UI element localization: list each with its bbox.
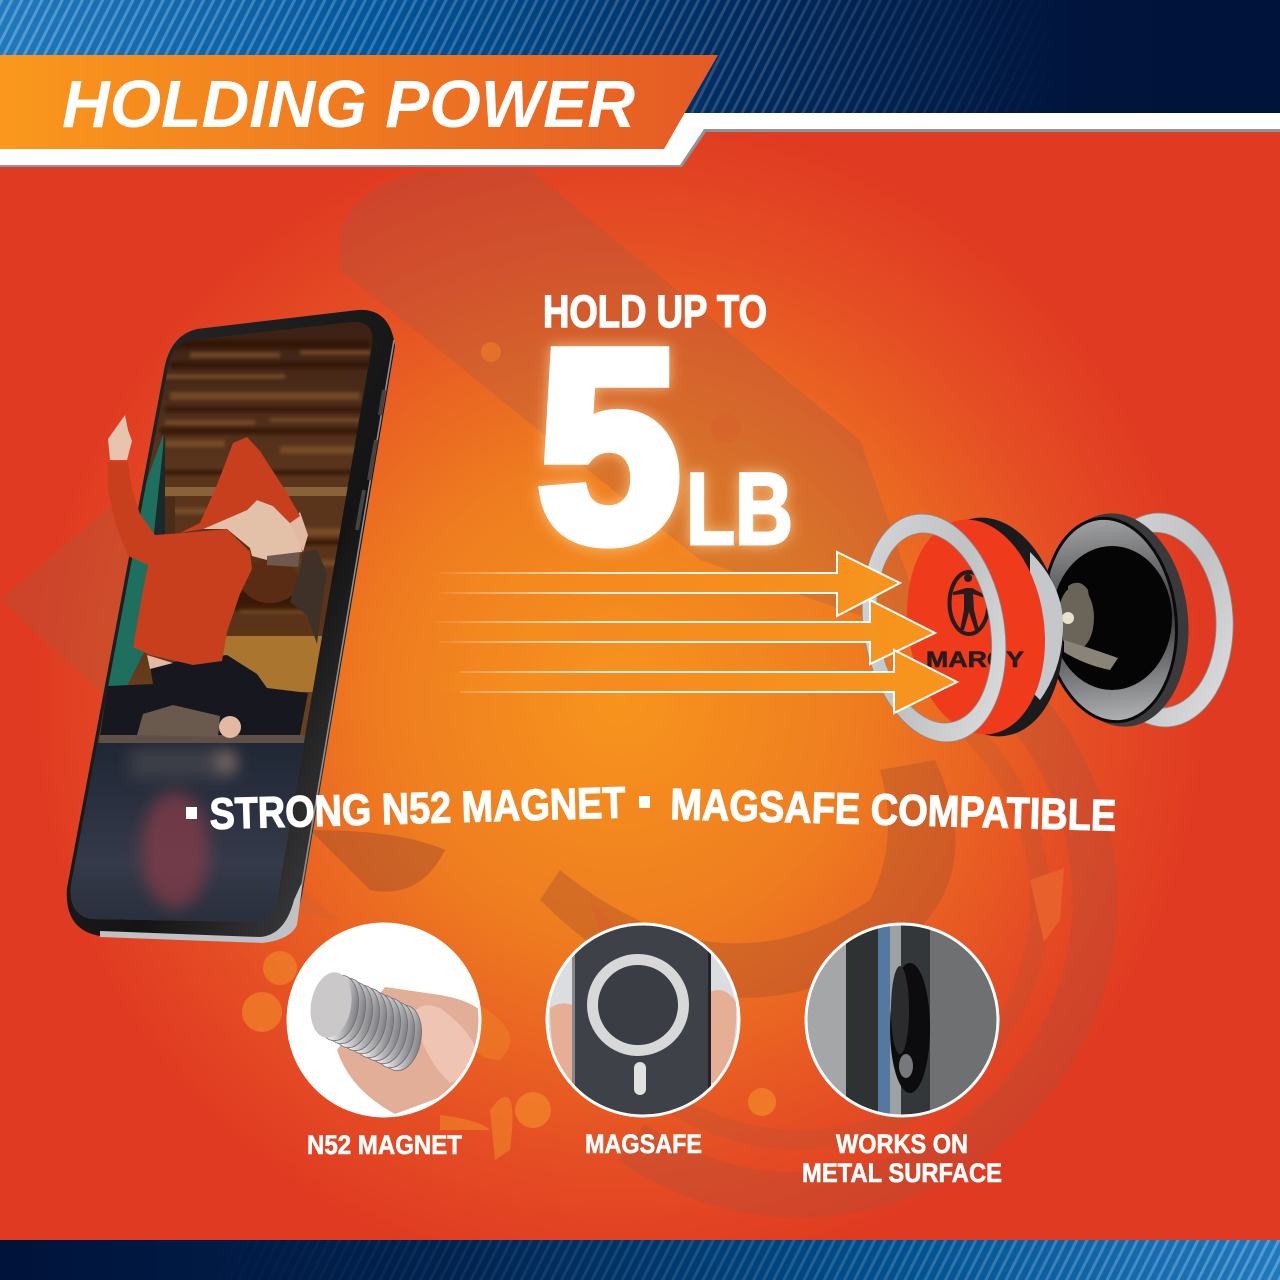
feature line: magsafe compatible: MAGSAFE COMPATIBLE (670, 780, 1117, 841)
marcy logo (926, 572, 1024, 672)
legs (100, 655, 308, 735)
feature line: strong n52 magnet: STRONG N52 MAGNET (209, 778, 626, 839)
back ring (1085, 509, 1239, 731)
bottom stripe band (0, 1240, 1280, 1280)
top stripe header band (0, 0, 1280, 116)
label: magsafe: MAGSAFE (585, 1129, 702, 1159)
label: n52 magnet: N52 MAGNET (307, 1130, 462, 1160)
label: works on metal surface: WORKS ON (836, 1129, 968, 1159)
white header ribbon (0, 113, 1280, 167)
heading: hold up to: HOLD UP TO (543, 286, 767, 337)
front metal ring (845, 503, 1023, 753)
silver neck band (1030, 552, 1063, 700)
force arrows (400, 552, 957, 713)
wooden barre (150, 487, 350, 496)
circle photo: metal surface (800, 920, 1005, 1120)
phone buttons (357, 390, 384, 530)
phone with yoga photo (60, 310, 395, 943)
face and neck (203, 500, 302, 560)
circle photo: magsafe (546, 922, 740, 1118)
wood floor behind (217, 636, 325, 692)
rear rim (903, 508, 1077, 746)
reflective floor (70, 743, 304, 922)
green curtain (108, 435, 163, 686)
red top (108, 462, 252, 665)
big number 5 LB (538, 296, 793, 597)
dome hub (1058, 583, 1118, 670)
big number 5 LB: LB (686, 452, 793, 566)
big number 5 LB: 5 (538, 296, 680, 597)
label: works on metal surface: METAL SURFACE (802, 1158, 1002, 1188)
label: works on metal surface (802, 1129, 1002, 1188)
phone screen photo (70, 322, 372, 922)
arrow 2 (400, 600, 935, 664)
leg warmer (137, 705, 220, 737)
circle photo: n52 magnet (287, 923, 482, 1117)
magnet mount exploded view (845, 503, 1239, 753)
raised hand (108, 415, 132, 460)
marcy logo: MARCY (926, 647, 1024, 672)
title: HOLDING POWER (62, 67, 635, 142)
arrow 1 (420, 552, 900, 616)
yoga mat (100, 735, 310, 743)
title banner (0, 55, 718, 149)
glove (290, 550, 327, 644)
black dome (1037, 506, 1199, 734)
red adhesive disc (894, 511, 1058, 743)
arrow 3 (440, 650, 957, 713)
yoga figure (100, 415, 327, 738)
hair (241, 559, 299, 603)
